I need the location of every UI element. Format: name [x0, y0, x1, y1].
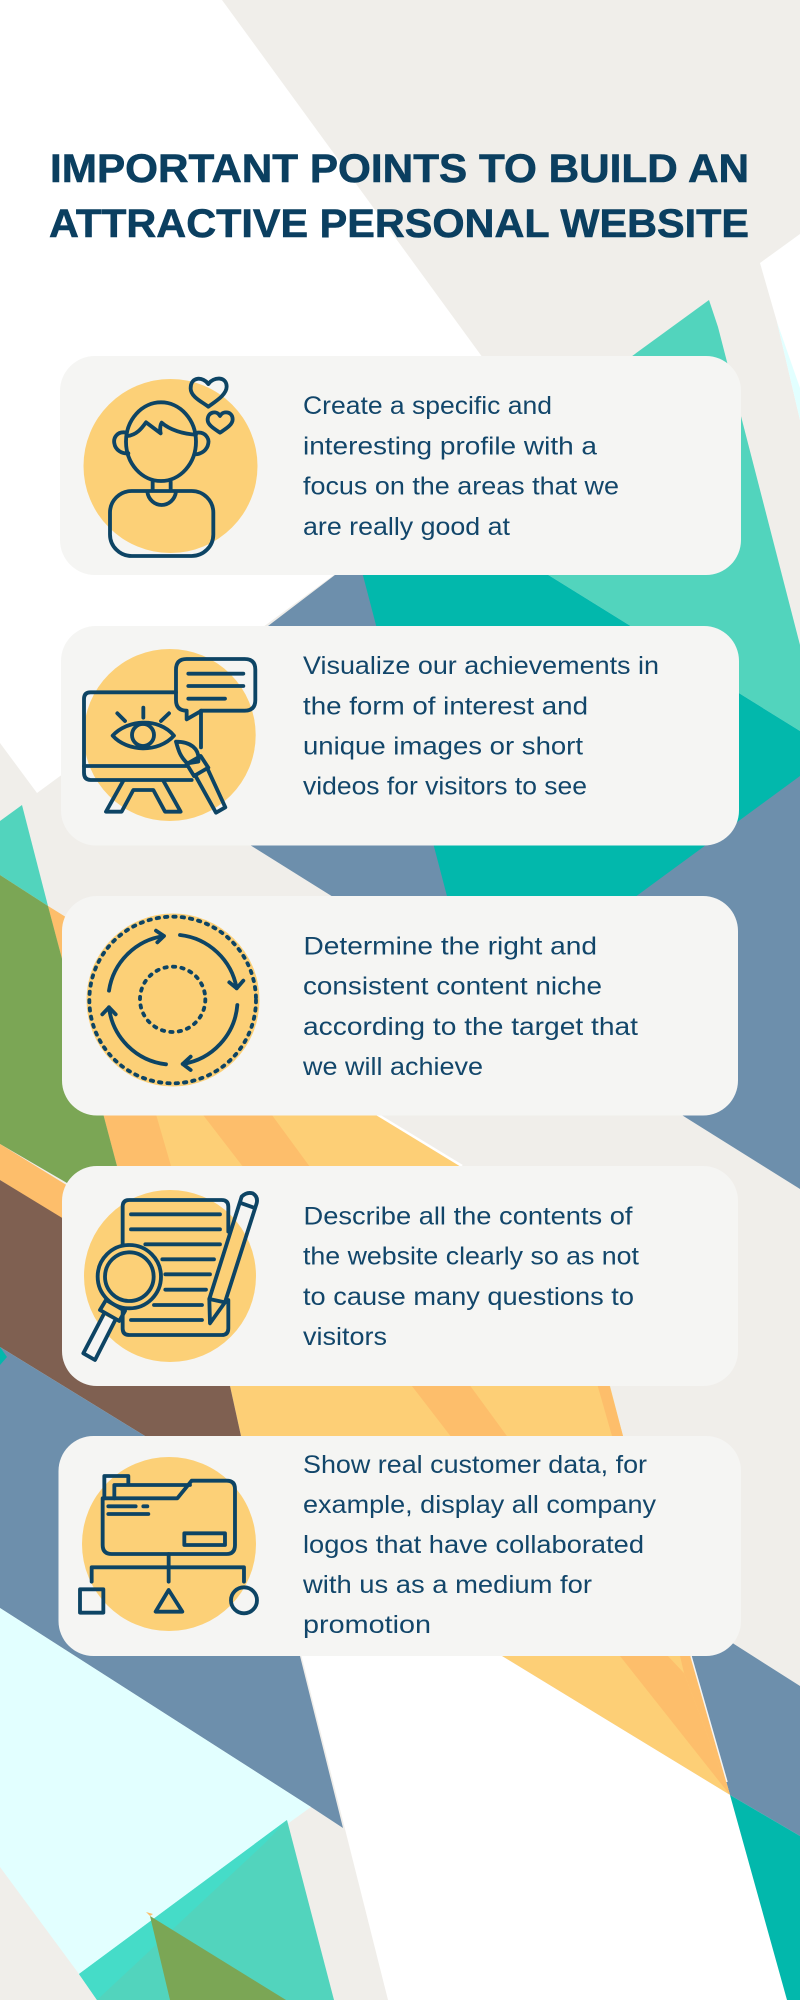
text: point 5: Show real customer data, for [303, 1451, 647, 1479]
text: point 5: with us as a medium for [302, 1571, 592, 1599]
text: point 1: are really good at [303, 513, 510, 541]
text: point 3: Determine the right and [304, 932, 597, 960]
text: point 3: according to the target that [303, 1013, 638, 1041]
text: point 1 [303, 392, 619, 541]
icon: circular arrows with dotted rings [86, 914, 260, 1086]
icon: document, magnifier and pencil [83, 1190, 257, 1362]
text: point 2 [303, 652, 659, 800]
text: point 4: visitors [303, 1323, 387, 1351]
text: point 4: to cause many questions to [303, 1283, 634, 1311]
text: point 4 [303, 1202, 639, 1351]
text: point 5: promotion [303, 1611, 431, 1639]
text: point 5: logos that have collaborated [303, 1531, 644, 1559]
icon: person with hearts [84, 379, 258, 556]
panel: point 1 profile [60, 356, 741, 575]
text: point 2: unique images or short [303, 732, 583, 760]
text: point 5: example, display all company [303, 1491, 657, 1519]
text: point 2: videos for visitors to see [303, 772, 587, 800]
text: point 3: consistent content niche [303, 972, 602, 1000]
icon: easel with eye, speech bubble and brush [84, 649, 256, 821]
text: point 1: focus on the areas that we [303, 472, 619, 500]
text: point 1: Create a specific and [303, 392, 552, 420]
text: point 3: we will achieve [302, 1053, 483, 1081]
text: point 4: Describe all the contents of [304, 1202, 633, 1230]
text: point 5 [302, 1451, 657, 1639]
icon: folder with hierarchy shapes [80, 1457, 257, 1631]
panel: point 4 describe contents [62, 1166, 738, 1386]
text: point 2: Visualize our achievements in [303, 652, 659, 680]
text: point 1: interesting profile with a [303, 432, 597, 460]
panel: point 3 content niche [62, 896, 738, 1116]
title: IMPORTANT POINTS TO BUILD AN [50, 147, 749, 191]
panel: point 5 customer data [58, 1436, 741, 1656]
title [49, 147, 749, 246]
text: point 2: the form of interest and [303, 692, 588, 720]
text: point 4: the website clearly so as not [303, 1242, 639, 1270]
panel: point 2 visuals [61, 626, 739, 846]
title: ATTRACTIVE PERSONAL WEBSITE [49, 202, 749, 246]
text: point 3 [302, 932, 638, 1081]
